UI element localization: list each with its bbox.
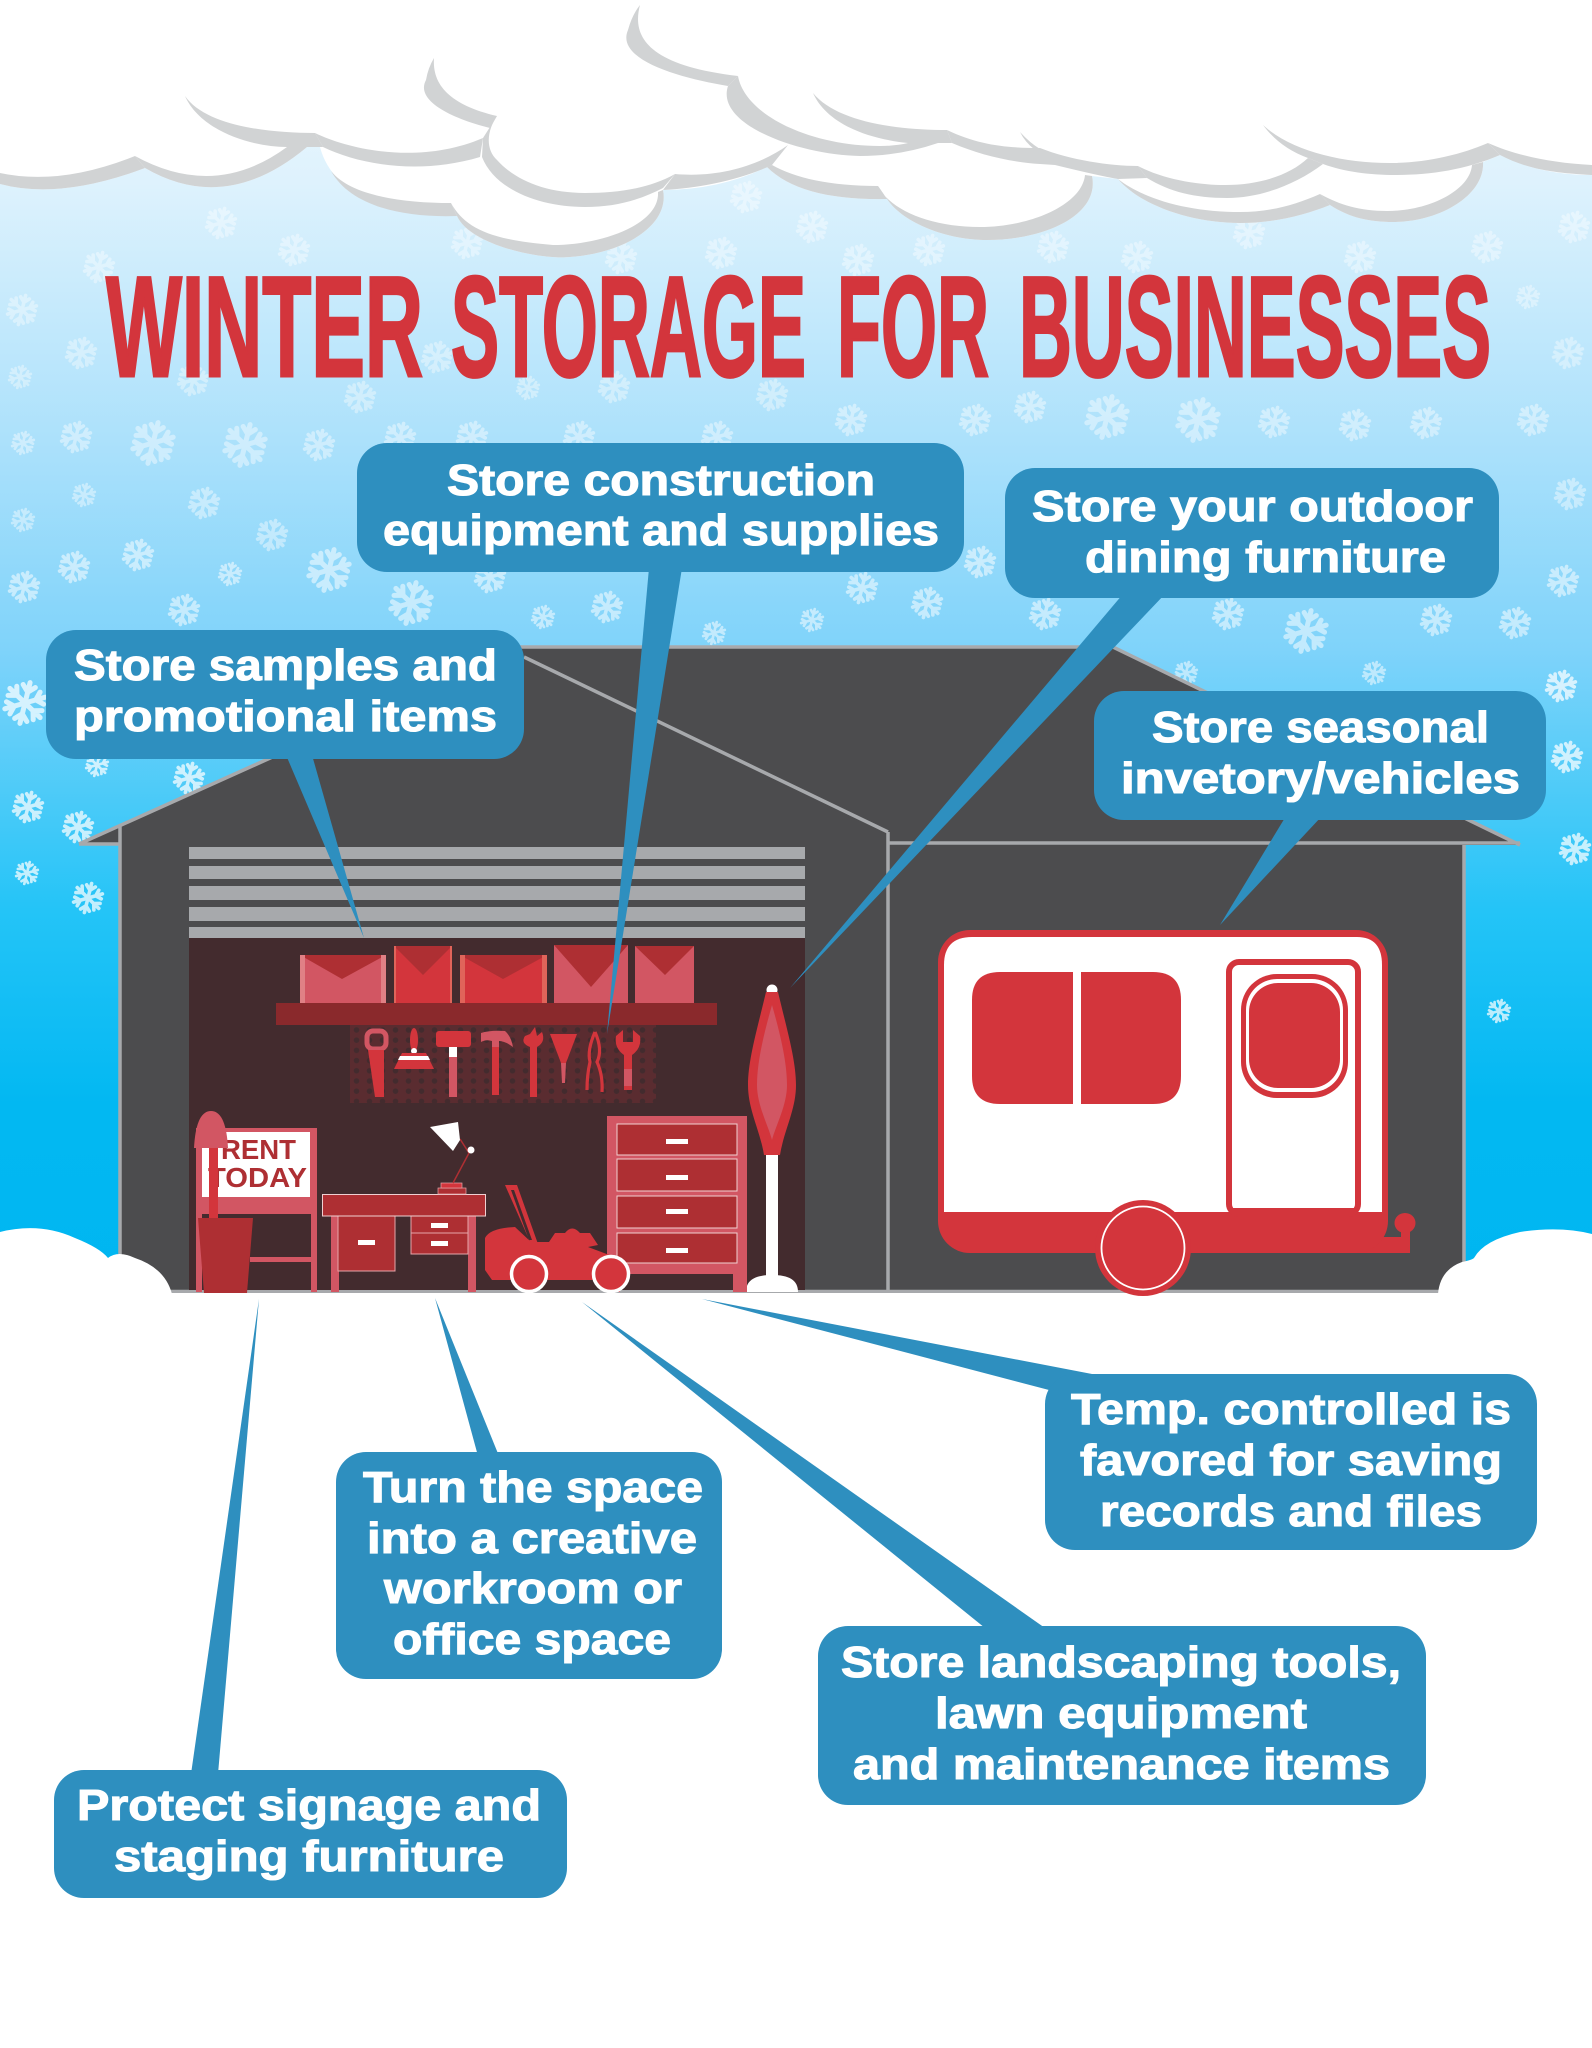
shelf bbox=[276, 1003, 717, 1025]
callout: creative workroom or office space: office space bbox=[393, 1615, 671, 1664]
callout: outdoor dining furniture: Store your outdoor bbox=[1032, 482, 1473, 531]
callout: signage and staging furniture bbox=[54, 1299, 567, 1898]
callout: seasonal inventory and vehicles: invetory/vehicles bbox=[1121, 754, 1520, 803]
trailer windows bbox=[972, 972, 1181, 1104]
icon: desk lamp bbox=[430, 1122, 474, 1194]
desk and lamp bbox=[322, 1122, 486, 1292]
callout: creative workroom or office space: into a creative bbox=[367, 1514, 697, 1563]
pegboard with tools bbox=[350, 1025, 656, 1103]
for rent sign: RENT bbox=[221, 1134, 296, 1165]
callout: samples and promotional items: Store samples and bbox=[74, 641, 497, 690]
callout: temperature controlled records: Temp. controlled is bbox=[1071, 1385, 1511, 1434]
callout: samples and promotional items: promotional items bbox=[74, 692, 497, 741]
for rent sign: TODAY bbox=[208, 1162, 307, 1193]
garage door slats bbox=[189, 847, 805, 938]
callout: seasonal inventory and vehicles bbox=[1094, 691, 1546, 925]
icon: mallet bbox=[436, 1031, 471, 1097]
icon: wrench bbox=[523, 1027, 543, 1097]
dresser bbox=[607, 1116, 747, 1292]
shovel in pot bbox=[194, 1111, 253, 1293]
callout: temperature controlled records: records and files bbox=[1100, 1487, 1482, 1536]
callout: creative workroom or office space: Turn the space bbox=[363, 1463, 703, 1512]
snowflakes: middle band bbox=[9, 389, 1588, 553]
callout: outdoor dining furniture: dining furniture bbox=[1085, 533, 1446, 582]
snow mound: right bbox=[1438, 1229, 1592, 1294]
snowflakes: lower band bbox=[6, 537, 1581, 687]
callout: creative workroom or office space bbox=[336, 1298, 722, 1679]
callout: construction equipment and supplies: Store construction bbox=[447, 456, 875, 505]
icon: funnel bbox=[550, 1034, 577, 1083]
icon: hammer bbox=[481, 1031, 513, 1095]
garage interior bbox=[189, 938, 805, 1290]
trailer door bbox=[1229, 962, 1358, 1216]
snow-filled ground bbox=[0, 1293, 1592, 2048]
callout: landscaping tools and lawn equipment: lawn equipment bbox=[935, 1689, 1307, 1738]
snowflakes: upper band bbox=[4, 179, 1592, 415]
lawn mower bbox=[485, 1185, 628, 1292]
storage boxes on shelf bbox=[300, 945, 694, 1003]
callout: landscaping tools and lawn equipment bbox=[582, 1302, 1426, 1805]
callout: outdoor dining furniture bbox=[790, 468, 1499, 988]
callout: temperature controlled records: favored for saving bbox=[1080, 1436, 1502, 1485]
icon: open wrench bbox=[616, 1030, 640, 1090]
callout: landscaping tools and lawn equipment: and maintenance items bbox=[853, 1740, 1390, 1789]
clouds bbox=[0, 0, 1592, 257]
trailer wheel bbox=[1095, 1200, 1191, 1296]
callout: seasonal inventory and vehicles: Store seasonal bbox=[1152, 703, 1489, 752]
camper trailer bbox=[938, 930, 1416, 1296]
sky background bbox=[0, 0, 1592, 1300]
icon: saw bbox=[367, 1031, 386, 1097]
callout: construction equipment and supplies bbox=[357, 443, 964, 1034]
icon: scraper bbox=[394, 1028, 434, 1069]
title: FOR bbox=[837, 248, 989, 407]
callout: signage and staging furniture: staging furniture bbox=[114, 1832, 504, 1881]
icon: pliers bbox=[587, 1032, 602, 1092]
callout: signage and staging furniture: Protect signage and bbox=[77, 1781, 541, 1830]
snowflakes: bottom band bbox=[0, 668, 1592, 1025]
snow mound: left bbox=[0, 1228, 172, 1294]
callout: construction equipment and supplies: equipment and supplies bbox=[383, 506, 939, 555]
callout: landscaping tools and lawn equipment: Store landscaping tools, bbox=[841, 1638, 1401, 1687]
callout: temperature controlled records bbox=[702, 1299, 1537, 1550]
callout: samples and promotional items bbox=[46, 630, 524, 938]
callout: creative workroom or office space: workroom or bbox=[383, 1564, 682, 1613]
title: STORAGE bbox=[451, 248, 806, 407]
garage building bbox=[79, 647, 1520, 1292]
for rent sign bbox=[196, 1128, 317, 1292]
title bbox=[106, 248, 1491, 407]
umbrella bbox=[746, 984, 798, 1292]
title: WINTER bbox=[106, 248, 423, 407]
